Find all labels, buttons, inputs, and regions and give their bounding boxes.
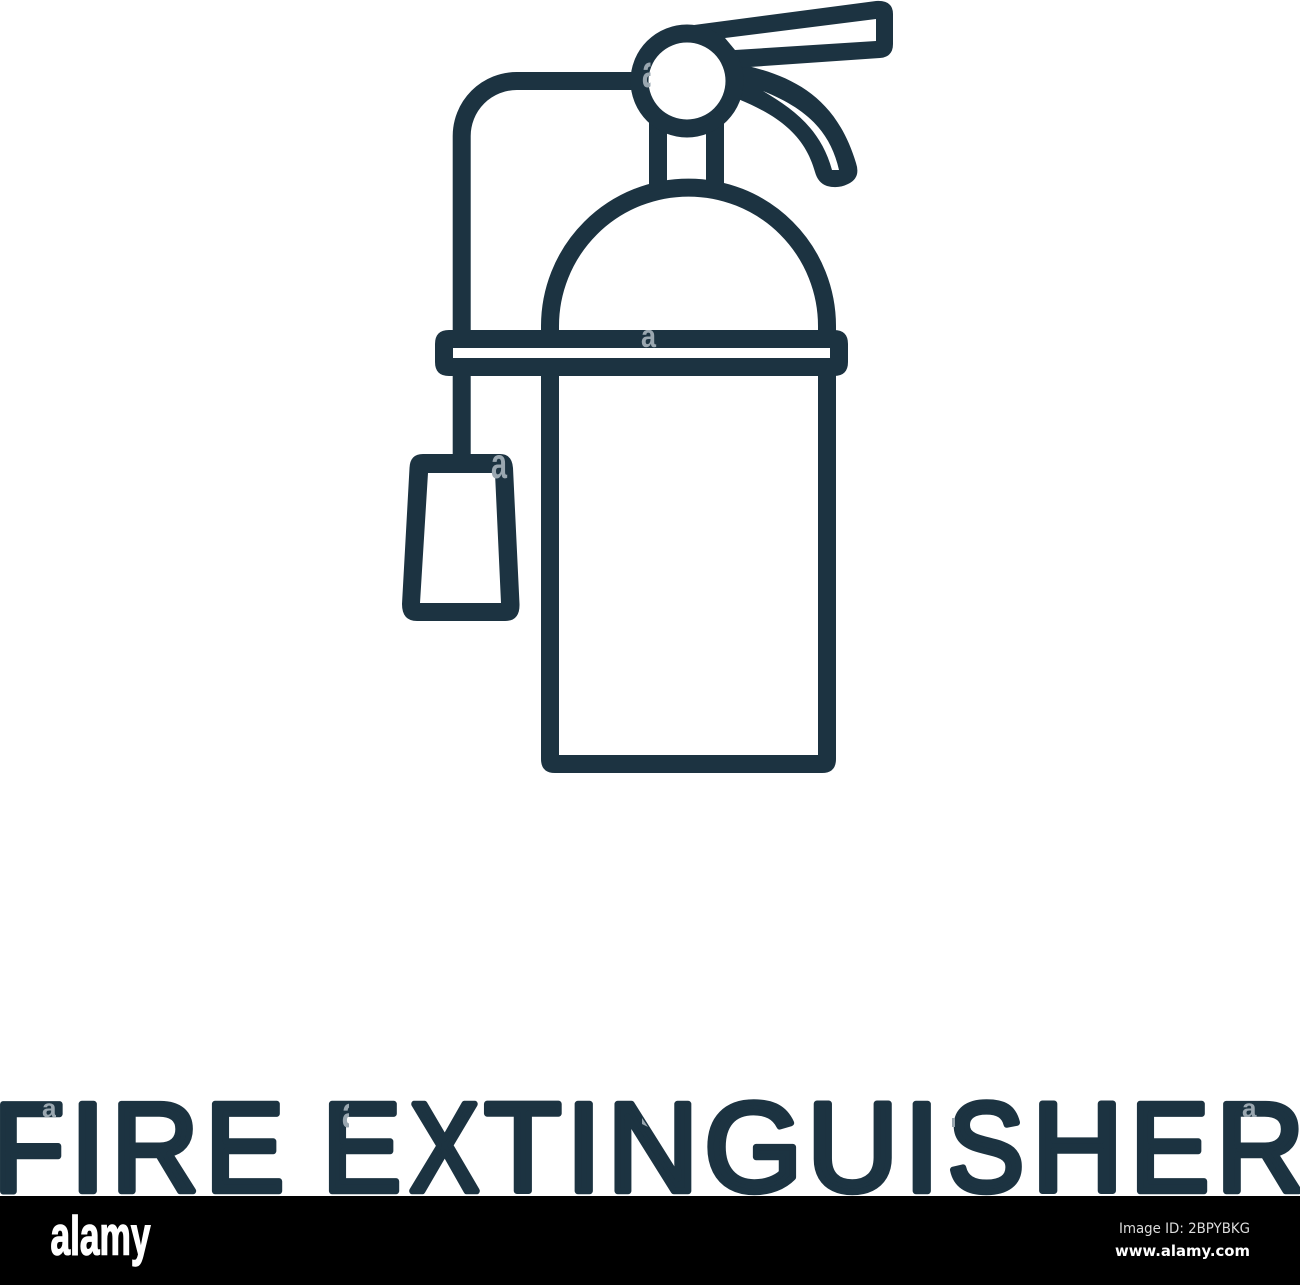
watermark: stock marks: a <box>342 1088 358 1137</box>
logo: alamy: alamy <box>50 1204 151 1266</box>
website: www.alamy.com <box>1115 1242 1250 1260</box>
title: E <box>205 1077 284 1218</box>
title: S <box>948 1077 1024 1218</box>
title: N <box>607 1077 698 1218</box>
watermark: stock marks: a <box>641 318 656 354</box>
icon part: nozzle tassel <box>402 454 520 621</box>
icon part: hose pipe <box>462 81 640 340</box>
title: T <box>484 1077 561 1218</box>
title: U <box>807 1077 898 1218</box>
icon part: cylinder body <box>541 370 836 773</box>
watermark: stock marks: a <box>1242 1093 1257 1123</box>
watermark: stock marks: a <box>491 440 508 488</box>
icon part: valve ring <box>640 34 734 128</box>
title: E <box>1130 1077 1209 1218</box>
title <box>0 1099 1300 1196</box>
title: I <box>566 1077 601 1218</box>
icon part: cylinder band <box>435 330 848 376</box>
title: X <box>410 1077 479 1218</box>
title: R <box>111 1077 199 1218</box>
icon part: handle <box>694 1 893 68</box>
icon part: lower lever <box>730 64 857 187</box>
footer band <box>0 1196 1300 1285</box>
image id: Image ID: 2BPYBKG <box>1119 1221 1250 1237</box>
icon part: cylinder dome <box>550 188 827 332</box>
icon part: hose to tassel <box>453 367 471 460</box>
watermark: stock marks: a <box>642 46 659 97</box>
title: I <box>904 1077 939 1218</box>
watermark: stock marks <box>42 46 1257 1137</box>
icon: fire extinguisher <box>402 1 893 773</box>
title: I <box>70 1077 105 1218</box>
title: E <box>322 1077 401 1218</box>
title: H <box>1032 1077 1123 1218</box>
icon part: neck <box>658 120 715 188</box>
watermark: stock marks: a <box>42 1093 57 1123</box>
title: G <box>704 1077 802 1218</box>
